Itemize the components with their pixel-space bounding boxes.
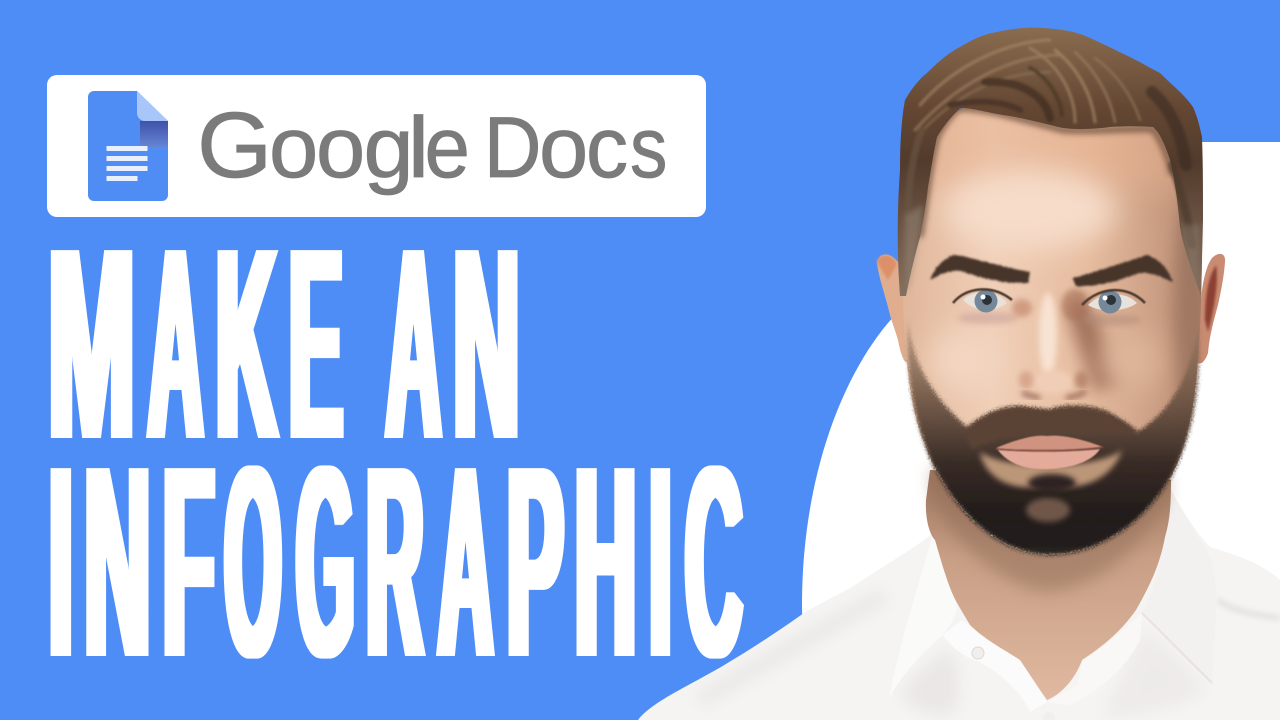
title line 2: C xyxy=(685,409,742,714)
title line 1: E xyxy=(289,191,343,496)
logo wordmark: g xyxy=(364,99,414,196)
facial shading and detail xyxy=(923,110,1202,420)
eyebrows xyxy=(930,255,1173,286)
shirt xyxy=(638,490,1280,720)
sideburn fade xyxy=(905,205,1200,295)
collar band and button xyxy=(943,620,1047,712)
ears xyxy=(877,254,1225,364)
title line 1: A xyxy=(148,193,203,497)
beard xyxy=(908,320,1200,555)
title line 2: G xyxy=(296,410,354,715)
title line 1 xyxy=(48,191,520,497)
logo wordmark xyxy=(197,94,667,198)
logo wordmark: o xyxy=(316,100,365,196)
logo wordmark: o xyxy=(269,100,318,196)
title xyxy=(48,191,742,715)
title line 1: M xyxy=(48,191,135,496)
icon: Google Docs document xyxy=(88,91,168,201)
logo wordmark: c xyxy=(586,100,628,196)
title line 2: I xyxy=(49,410,73,714)
chin tuft xyxy=(1026,498,1070,522)
logo panel xyxy=(47,75,706,217)
title line 2: A xyxy=(438,411,493,715)
hair xyxy=(898,28,1203,296)
title line 1: K xyxy=(216,191,277,496)
right collar xyxy=(1142,490,1217,683)
title line 2: R xyxy=(366,409,424,714)
shirt soft shading xyxy=(709,599,1279,712)
portrait of presenter xyxy=(638,28,1280,720)
logo wordmark: s xyxy=(630,100,667,196)
logo wordmark: o xyxy=(539,100,588,196)
logo wordmark: e xyxy=(424,99,470,195)
hair strands xyxy=(908,40,1192,245)
chin skin patch xyxy=(980,450,1122,488)
lips xyxy=(996,436,1103,469)
hairline soft edge xyxy=(920,108,1172,237)
face xyxy=(902,85,1202,555)
neck xyxy=(926,470,1171,700)
logo wordmark: l xyxy=(408,99,429,196)
mustache xyxy=(965,407,1140,450)
logo wordmark: G xyxy=(197,94,272,198)
eyes xyxy=(953,289,1145,314)
left collar xyxy=(889,533,957,698)
title line 2 xyxy=(49,409,742,715)
title line 2: N xyxy=(84,411,151,715)
white curved background shape xyxy=(802,142,1280,720)
title line 2: P xyxy=(507,409,564,714)
title line 2: H xyxy=(575,409,636,714)
title line 2: I xyxy=(649,409,672,714)
title line 1: N xyxy=(453,193,520,497)
neck shadow xyxy=(930,470,1168,592)
soul patch xyxy=(1028,474,1076,492)
title line 2: O xyxy=(225,410,281,715)
logo wordmark: D xyxy=(484,99,542,196)
title line 1: A xyxy=(386,193,441,497)
nose xyxy=(1019,293,1089,398)
title line 2: F xyxy=(163,409,214,714)
